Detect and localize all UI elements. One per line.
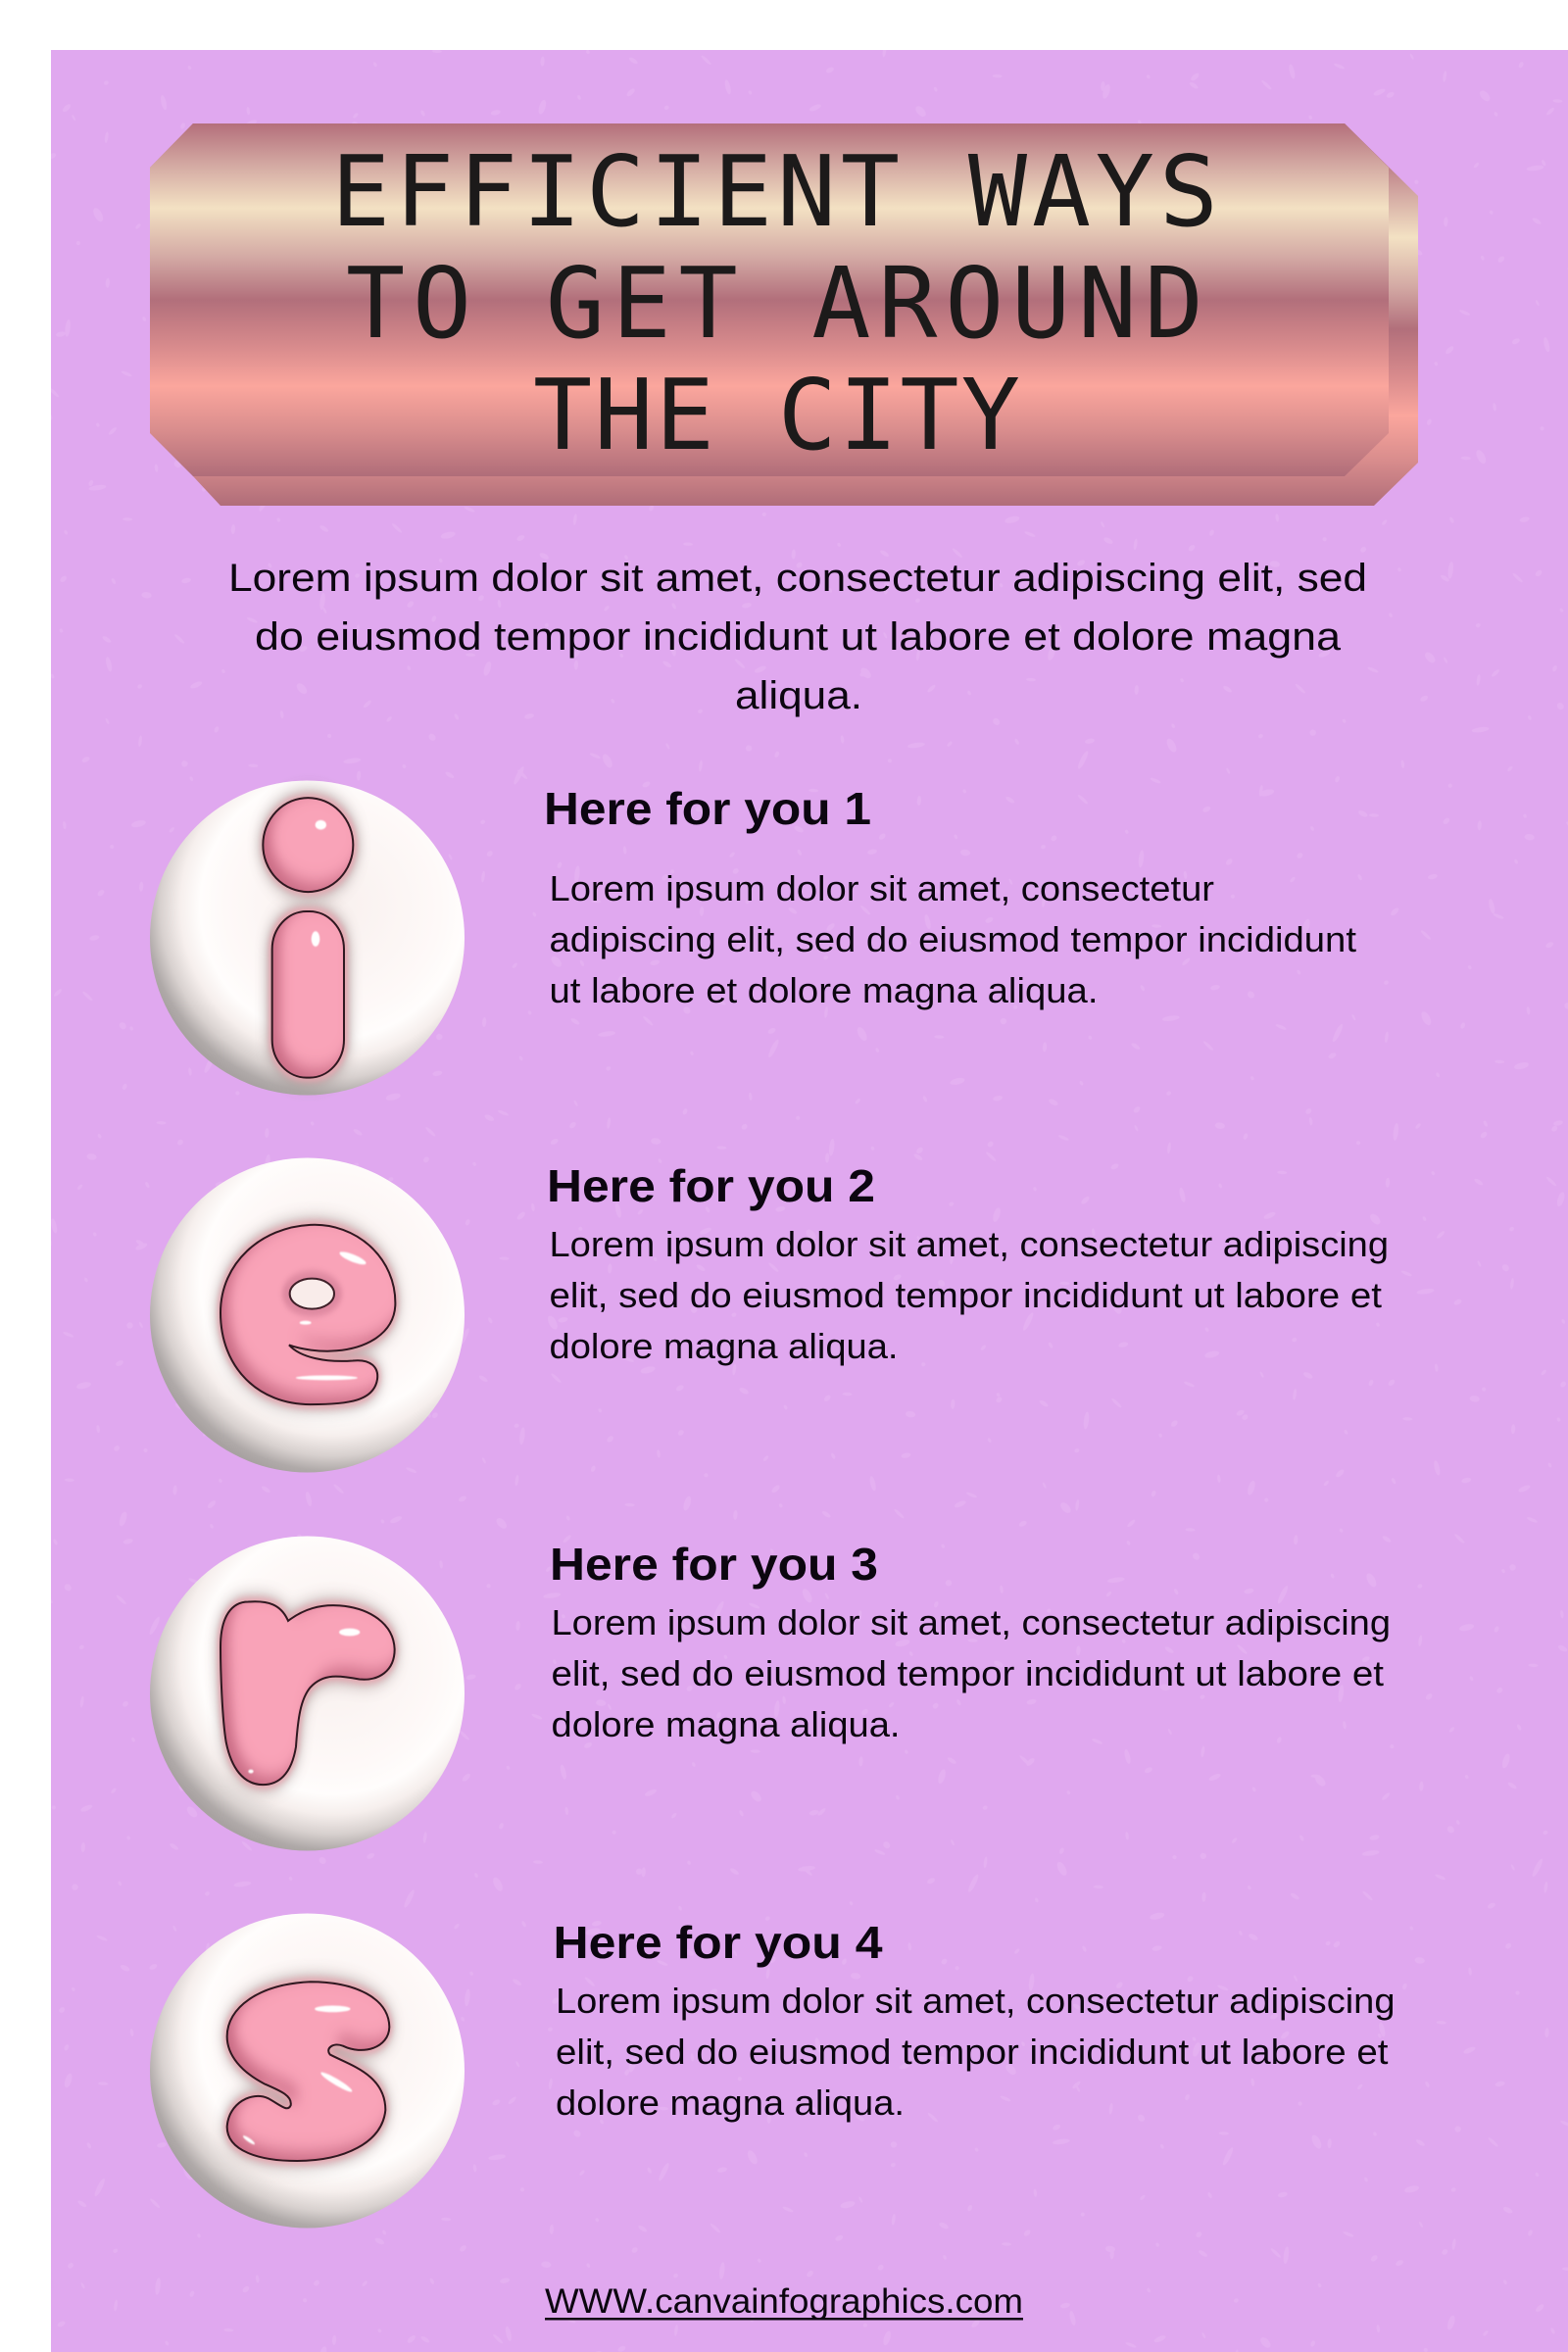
heading and text: item 3 (550, 1539, 1391, 1744)
heading and text: item 2: Here for you 2 (547, 1160, 875, 1211)
heading and text: item 2: dolore magna aliqua. (549, 1326, 898, 1366)
title text: THE CITY (533, 358, 1020, 472)
title banner (150, 123, 1418, 506)
heading and text: item 4 (553, 1917, 1396, 2123)
intro paragraph (228, 557, 1367, 717)
heading and text: item 3: elit, sed do eiusmod tempor incididunt ut labore et (551, 1653, 1384, 1693)
heading and text: item 4: dolore magna aliqua. (556, 2082, 905, 2123)
banner front face (150, 123, 1389, 476)
icon: letter i disc (150, 780, 465, 1096)
heading and text: item 1 (544, 783, 1356, 1010)
title text (331, 134, 1218, 472)
icon: letter s disc (150, 1913, 465, 2229)
title text: EFFICIENT WAYS (331, 134, 1218, 249)
heading and text: item 3: Lorem ipsum dolor sit amet, consectetur adipiscing (551, 1602, 1391, 1642)
heading and text: item 1: Lorem ipsum dolor sit amet, consectetur (549, 868, 1214, 908)
heading and text: item 4: Here for you 4 (553, 1917, 883, 1968)
heading and text: item 3: Here for you 3 (550, 1539, 878, 1590)
heading and text: item 3: dolore magna aliqua. (551, 1704, 900, 1744)
heading and text: item 1: ut labore et dolore magna aliqua. (549, 970, 1098, 1010)
heading and text: item 2 (547, 1160, 1389, 1366)
heading and text: item 1: adipiscing elit, sed do eiusmod tempor incididunt (549, 919, 1356, 959)
icon: letter e disc (150, 1158, 465, 1472)
intro paragraph: aliqua. (735, 674, 862, 717)
icon: letter r disc (150, 1537, 465, 1850)
intro paragraph: Lorem ipsum dolor sit amet, consectetur adipiscing elit, sed (228, 557, 1367, 600)
heading and text: item 1: Here for you 1 (544, 783, 871, 834)
heading and text: item 4: Lorem ipsum dolor sit amet, consectetur adipiscing (556, 1981, 1396, 2021)
intro paragraph: do eiusmod tempor incididunt ut labore et dolore magna (255, 615, 1342, 659)
banner back face (150, 123, 1418, 506)
heading and text: item 2: Lorem ipsum dolor sit amet, consectetur adipiscing (549, 1224, 1389, 1264)
title text: TO GET AROUND (346, 246, 1203, 361)
footer website link: WWW.canvainfographics.com (545, 2282, 1023, 2321)
heading and text: item 2: elit, sed do eiusmod tempor incididunt ut labore et (549, 1275, 1382, 1315)
heading and text: item 4: elit, sed do eiusmod tempor incididunt ut labore et (556, 2032, 1388, 2072)
